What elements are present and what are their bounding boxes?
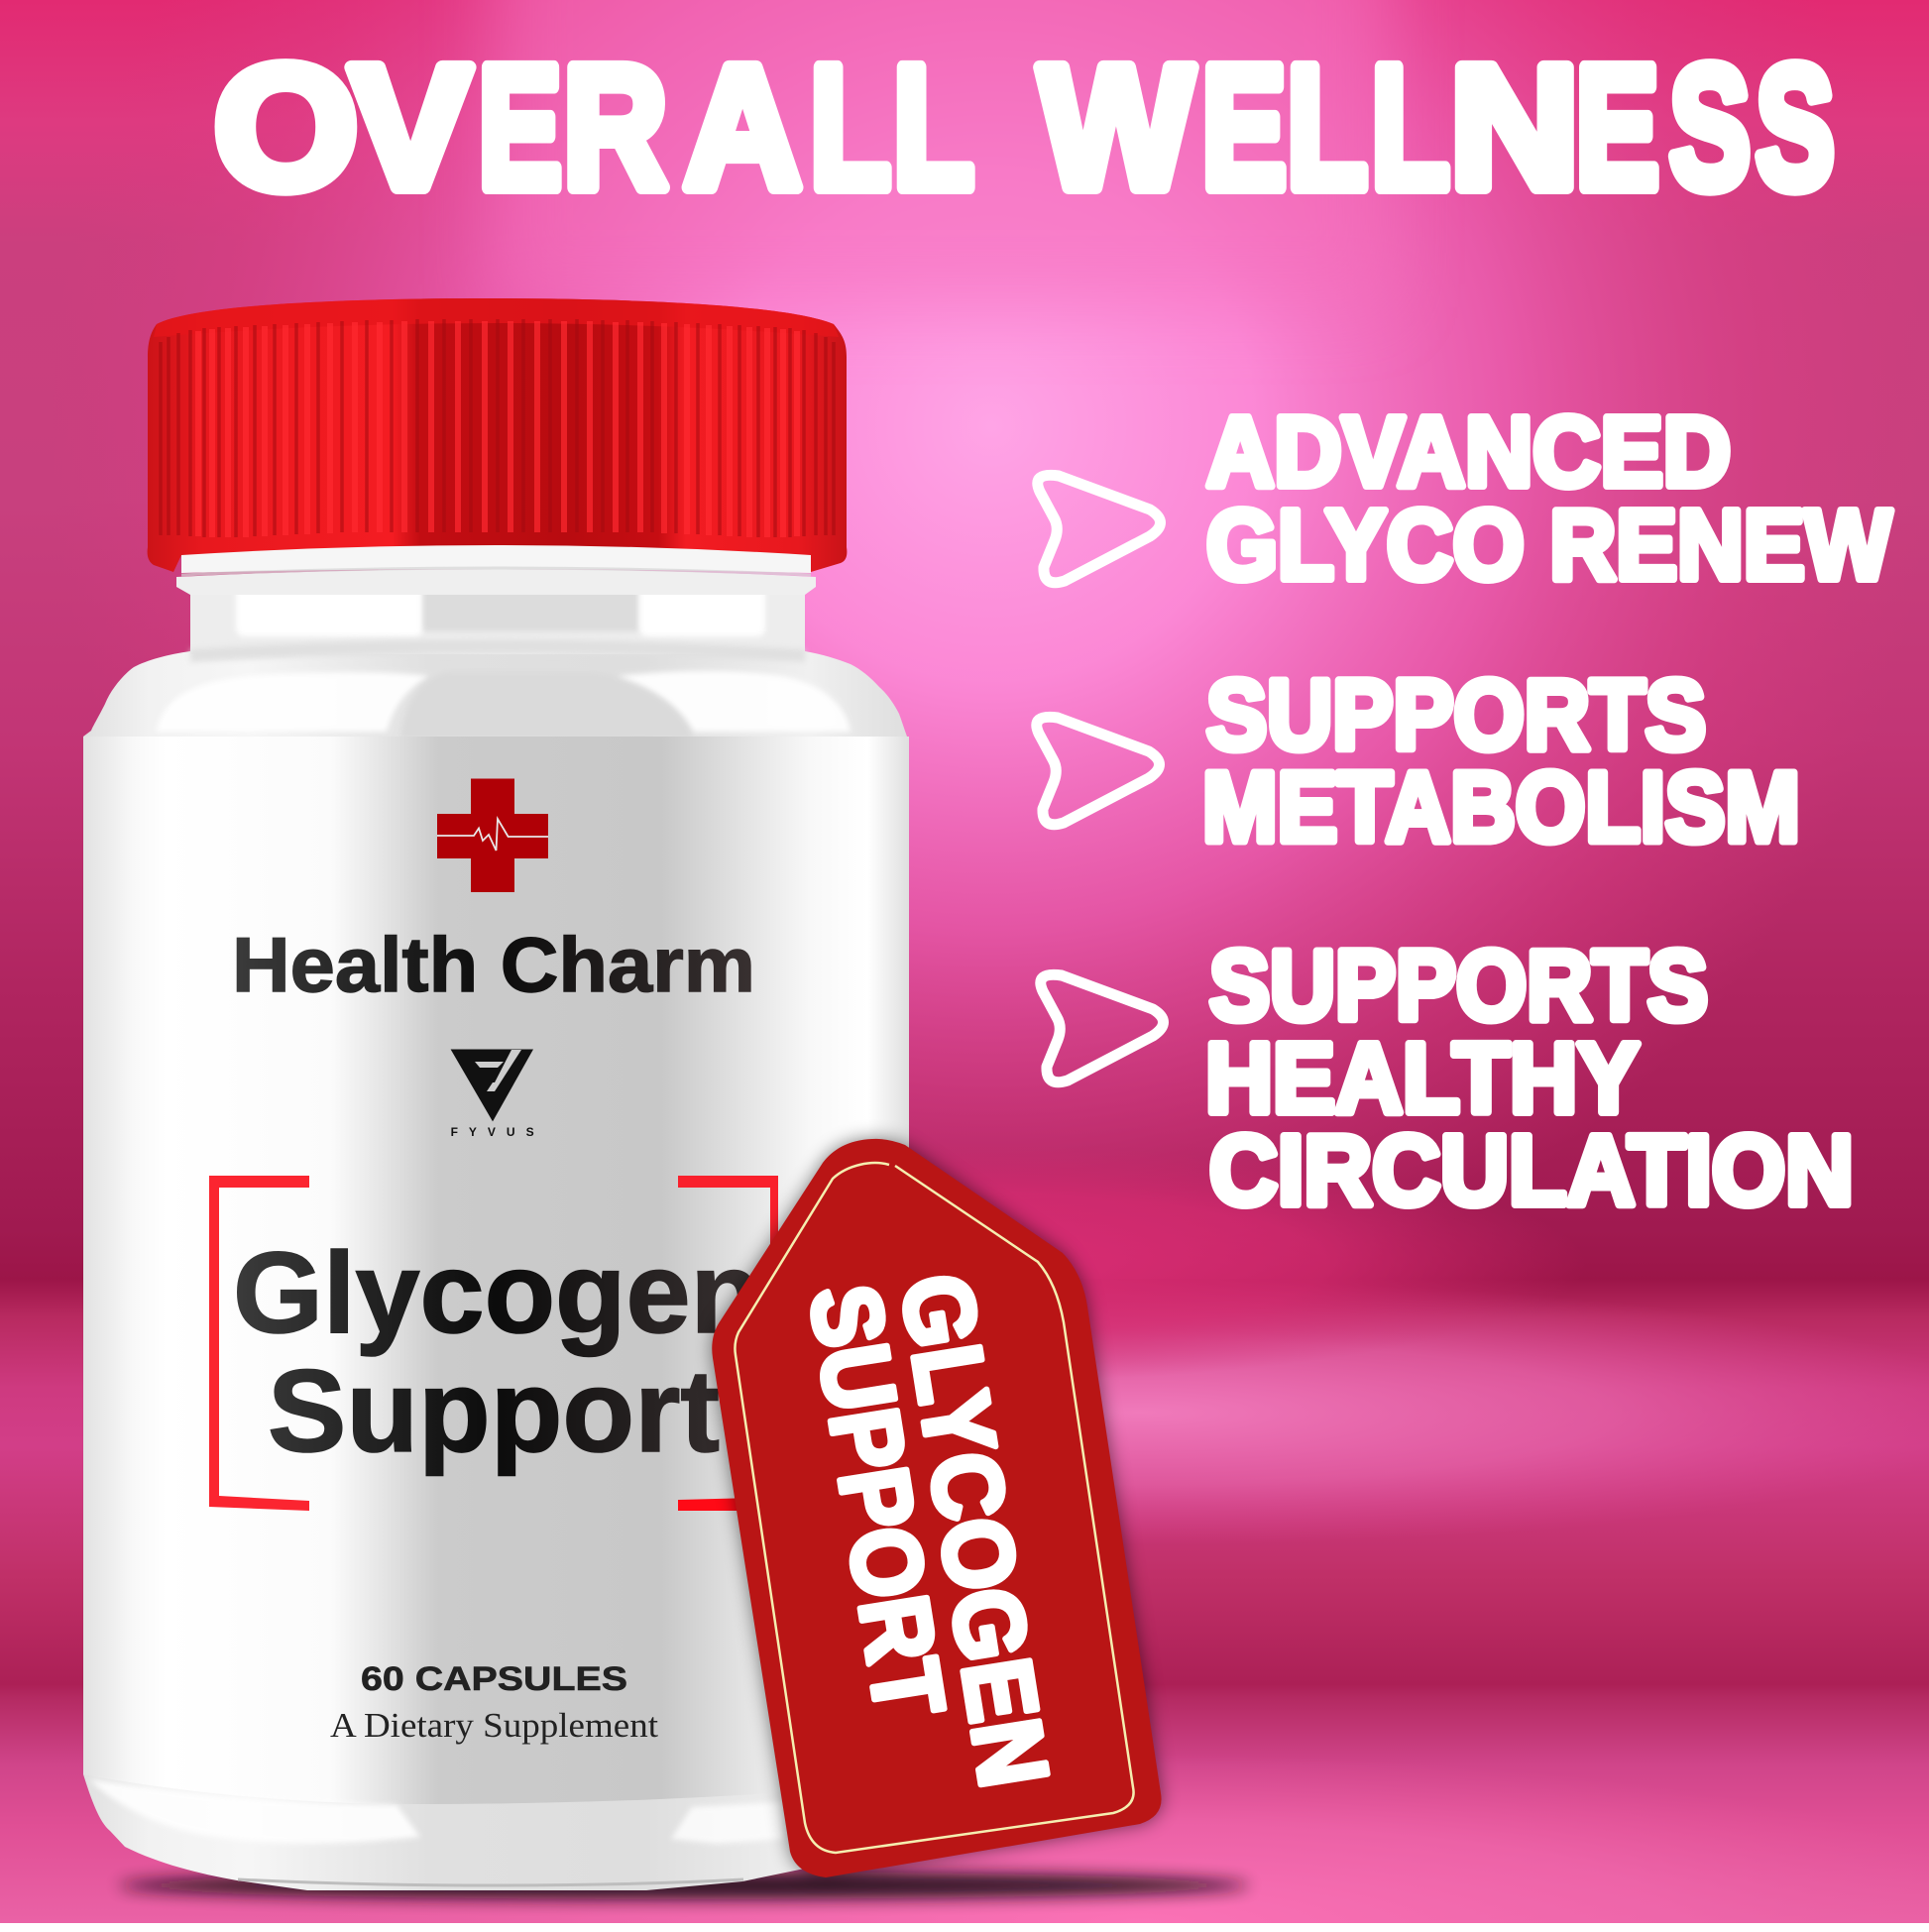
title: [214, 31, 1835, 225]
icon: fyvus logo: FYVUS: [451, 1125, 534, 1139]
title: N: [1450, 31, 1579, 225]
title: R: [563, 31, 667, 225]
benefit 3: [1041, 930, 1854, 1226]
title: W: [1039, 31, 1193, 225]
text: supports healthy circulation: CIRCULATION: [1209, 1115, 1854, 1226]
title: S: [1669, 31, 1751, 225]
text: advanced glyco renew: [1206, 397, 1892, 601]
text: supports healthy circulation: SUPPORTS: [1209, 930, 1708, 1041]
red brackets: [209, 1176, 778, 1511]
product name: [233, 1228, 761, 1477]
bottle label: [83, 737, 909, 1804]
capsule count: 60 CAPSULES: [361, 1660, 627, 1698]
bottle body: [83, 580, 909, 1890]
tag text: SUPPORT: [789, 1278, 965, 1724]
text: supports metabolism: [1202, 660, 1800, 862]
title: L: [893, 31, 973, 225]
icon: red medical cross with heartbeat: [437, 779, 548, 892]
text: supports healthy circulation: [1205, 930, 1854, 1226]
title: O: [214, 31, 358, 225]
floor shadow: [119, 1872, 1249, 1899]
title: E: [1576, 31, 1659, 225]
title: A: [684, 31, 801, 225]
icon: arrow 1: [1038, 475, 1160, 583]
title: L: [1287, 31, 1368, 225]
text: advanced glyco renew: ADVANCED: [1206, 397, 1731, 508]
neck highlights: [190, 572, 805, 662]
brand name: Health Charm: [232, 921, 755, 1008]
title: E: [478, 31, 562, 225]
tag text: GLYCOGEN: [880, 1267, 1070, 1794]
title: L: [810, 31, 890, 225]
supplement bottle: [83, 298, 909, 1890]
benefit 2: [1037, 660, 1800, 862]
title: S: [1756, 31, 1835, 225]
text: advanced glyco renew: GLYCO RENEW: [1206, 490, 1892, 601]
title: V: [350, 31, 471, 225]
bottom white strip: [0, 1923, 1929, 1932]
icon: arrow 3: [1041, 974, 1164, 1082]
red tag: [712, 1139, 1162, 1877]
icon: arrow 2: [1037, 717, 1160, 825]
neck ring: [176, 545, 816, 595]
bottle cap: [148, 298, 847, 572]
text: supports metabolism: SUPPORTS: [1206, 660, 1706, 771]
title: E: [1201, 31, 1287, 225]
product name: Glycogen: [233, 1228, 761, 1357]
benefit 1: [1038, 397, 1892, 601]
title: L: [1371, 31, 1449, 225]
tag inner outline: [735, 1163, 1134, 1853]
text: supports healthy circulation: HEALTHY: [1205, 1023, 1640, 1134]
tag text: [789, 1267, 1070, 1794]
shoulder highlights: [157, 671, 851, 739]
tag shape: [712, 1139, 1162, 1877]
product name: Support: [268, 1346, 720, 1477]
text: supports metabolism: METABOLISM: [1202, 751, 1800, 862]
bottom highlights: [90, 1779, 783, 1885]
dietary supplement line: A Dietary Supplement: [330, 1706, 658, 1745]
icon: fyvus logo: [451, 1049, 534, 1139]
